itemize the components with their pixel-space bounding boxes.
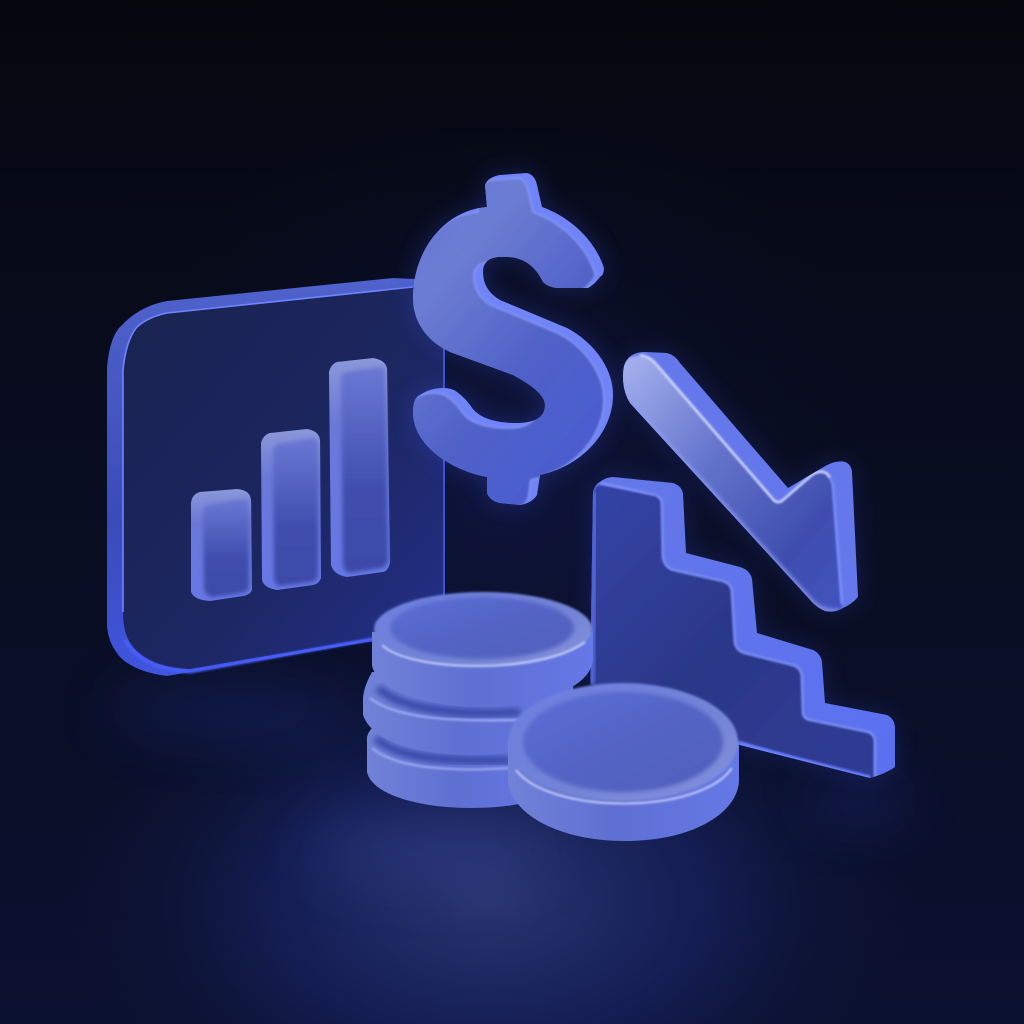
bar: short	[191, 489, 252, 601]
coin: top	[372, 592, 593, 707]
icon: descending stairs	[584, 477, 895, 782]
bar: medium	[261, 429, 321, 590]
panel edge	[107, 278, 415, 676]
floor reflections	[110, 688, 910, 878]
dollar body face	[404, 178, 604, 510]
bar: tall	[329, 358, 390, 577]
coin stack	[363, 592, 593, 808]
coin: middle	[363, 672, 580, 755]
panel face	[123, 287, 444, 669]
coin: bottom	[367, 728, 560, 808]
panel: glass chart card	[107, 278, 444, 676]
icon: falling arrow	[615, 352, 858, 625]
dollar body edge	[413, 173, 613, 505]
icon: dollar sign	[404, 173, 613, 510]
coin: front	[508, 683, 739, 841]
